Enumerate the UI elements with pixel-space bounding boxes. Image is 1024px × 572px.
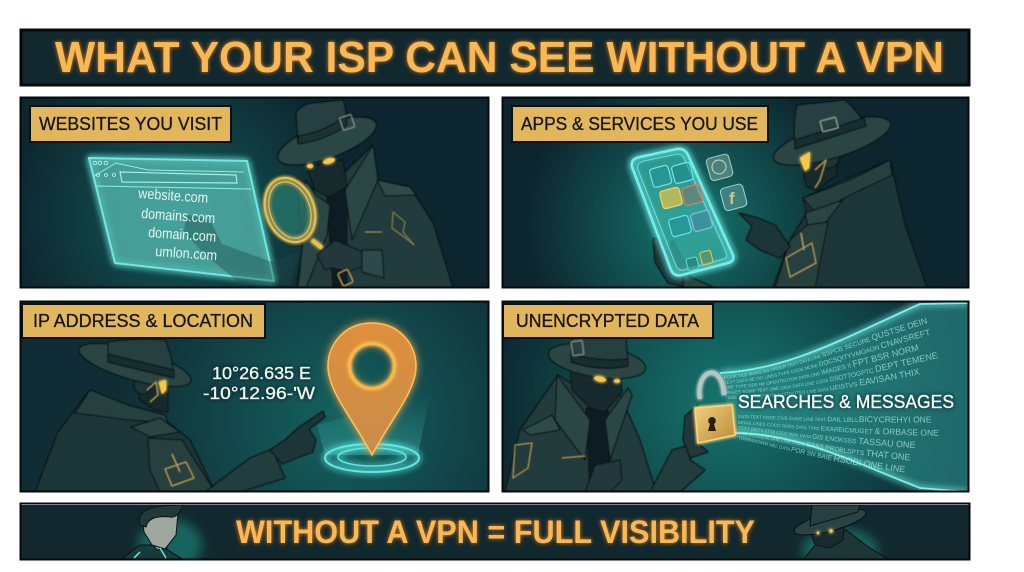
coordinates: 10°26.635 E bbox=[212, 363, 311, 383]
label: IP address: IP ADDRESS & LOCATION bbox=[33, 311, 253, 331]
small detective eyes bbox=[817, 529, 833, 534]
coordinates: -10°12.96-'W bbox=[203, 383, 316, 403]
eyes bbox=[594, 375, 620, 383]
stream text: TORRAHOIRM NEL DATA POR SN BAIE RSOBI ONE LINE bbox=[738, 436, 905, 472]
title banner bbox=[20, 30, 970, 86]
stream text: USE TEXT STCOTOOE THSTMOTEO LINE DATA UEISTVS EAVISAN THIX bbox=[728, 368, 920, 399]
coordinates bbox=[203, 363, 316, 403]
label: unencrypted data: UNENCRYPTED DATA bbox=[516, 311, 699, 331]
eye bbox=[159, 380, 166, 394]
glow behind figures bbox=[134, 515, 882, 558]
label: apps and services bbox=[512, 106, 768, 142]
detective viewed from behind bbox=[653, 100, 927, 288]
gloved hand bbox=[317, 240, 364, 272]
title text: WHAT YOUR ISP CAN SEE WITHOUT A VPN bbox=[55, 33, 944, 82]
panel: unencrypted data bbox=[504, 302, 968, 490]
stream text: LINE TYPE ODE NE OPOVTECTOR DATA ONE IMAGES !! FPT BSR NORM bbox=[726, 344, 918, 389]
person bbox=[120, 505, 184, 560]
stream text: PAGES SOME TEXT ONE GIOA DATA LINE CODE DSOTTOGPTC DEPT TEMENE bbox=[726, 352, 938, 394]
browser url list: domain.com bbox=[148, 225, 217, 246]
gloved hand bbox=[585, 460, 622, 492]
eyes bbox=[307, 157, 335, 168]
stream text: AND OCCOLNCSHE LINE CODE BAAS PROBLSPTS THAT ONE bbox=[738, 431, 910, 460]
browser url list bbox=[138, 188, 216, 260]
label: websites you visit bbox=[30, 106, 231, 142]
location rings bbox=[325, 444, 419, 472]
gloved holding hand bbox=[653, 238, 691, 288]
data stream bbox=[718, 302, 968, 490]
detective pointing bbox=[35, 335, 325, 492]
stream text bbox=[724, 318, 938, 472]
hologram light beam bbox=[317, 406, 428, 455]
floating social icon: f bbox=[729, 189, 735, 208]
label: IP address bbox=[22, 304, 265, 338]
small detective bbox=[792, 504, 889, 560]
searches and messages: SEARCHES & MESSAGES bbox=[738, 391, 954, 412]
footer banner bbox=[22, 505, 968, 558]
stream text: TEXT OOTS 6TTA CICO NON DATA GIS ENOKSSS TASSAU ONE bbox=[738, 426, 916, 448]
panel: apps and services you use bbox=[502, 97, 969, 288]
stream text: MORE LINES COCO GIIOS DATA TYPE EXAREICMUGET & ORBASE ONE bbox=[738, 420, 938, 436]
footer text: WITHOUT A VPN = FULL VISIBILITY bbox=[236, 514, 755, 550]
detective with magnifying glass bbox=[272, 100, 453, 288]
browser url list: umlon.com bbox=[155, 244, 218, 264]
stream text: DATA TEXT CODE CIVE OUGE LINE TEXT DAIL LBLLBICYCREHYI ONE bbox=[738, 414, 932, 423]
eye bbox=[800, 152, 810, 171]
stream text: TEXT DATA NE OO LINES TYPE CODE MORE DOCSQITYVMOAON CNAVSREFT bbox=[724, 329, 930, 384]
label: apps and services: APPS & SERVICES YOU USE bbox=[521, 114, 758, 134]
pointing arm bbox=[205, 449, 285, 492]
gloved pointing hand bbox=[739, 213, 790, 258]
detective with open padlock bbox=[505, 338, 708, 492]
browser window bbox=[89, 158, 300, 285]
label: websites you visit: WEBSITES YOU VISIT bbox=[39, 114, 222, 134]
app icons bbox=[649, 162, 713, 271]
panel: IP address and location bbox=[20, 301, 489, 492]
location pin bbox=[328, 323, 416, 455]
translucent arm behind browser bbox=[184, 214, 300, 285]
stream text: BOOK TILE MANS NO ORDER TEXT DATA LINE SSPCB SECURE QUSTSE DEIN bbox=[724, 318, 927, 379]
magnifying glass bbox=[256, 171, 324, 249]
browser url list: website.com bbox=[137, 186, 209, 207]
floating globe icon bbox=[706, 153, 734, 181]
open padlock bbox=[695, 373, 735, 443]
label: unencrypted data bbox=[503, 304, 713, 338]
browser url list: domains.com bbox=[141, 206, 216, 227]
phone bbox=[632, 149, 748, 275]
panel: websites you visit bbox=[20, 97, 489, 288]
